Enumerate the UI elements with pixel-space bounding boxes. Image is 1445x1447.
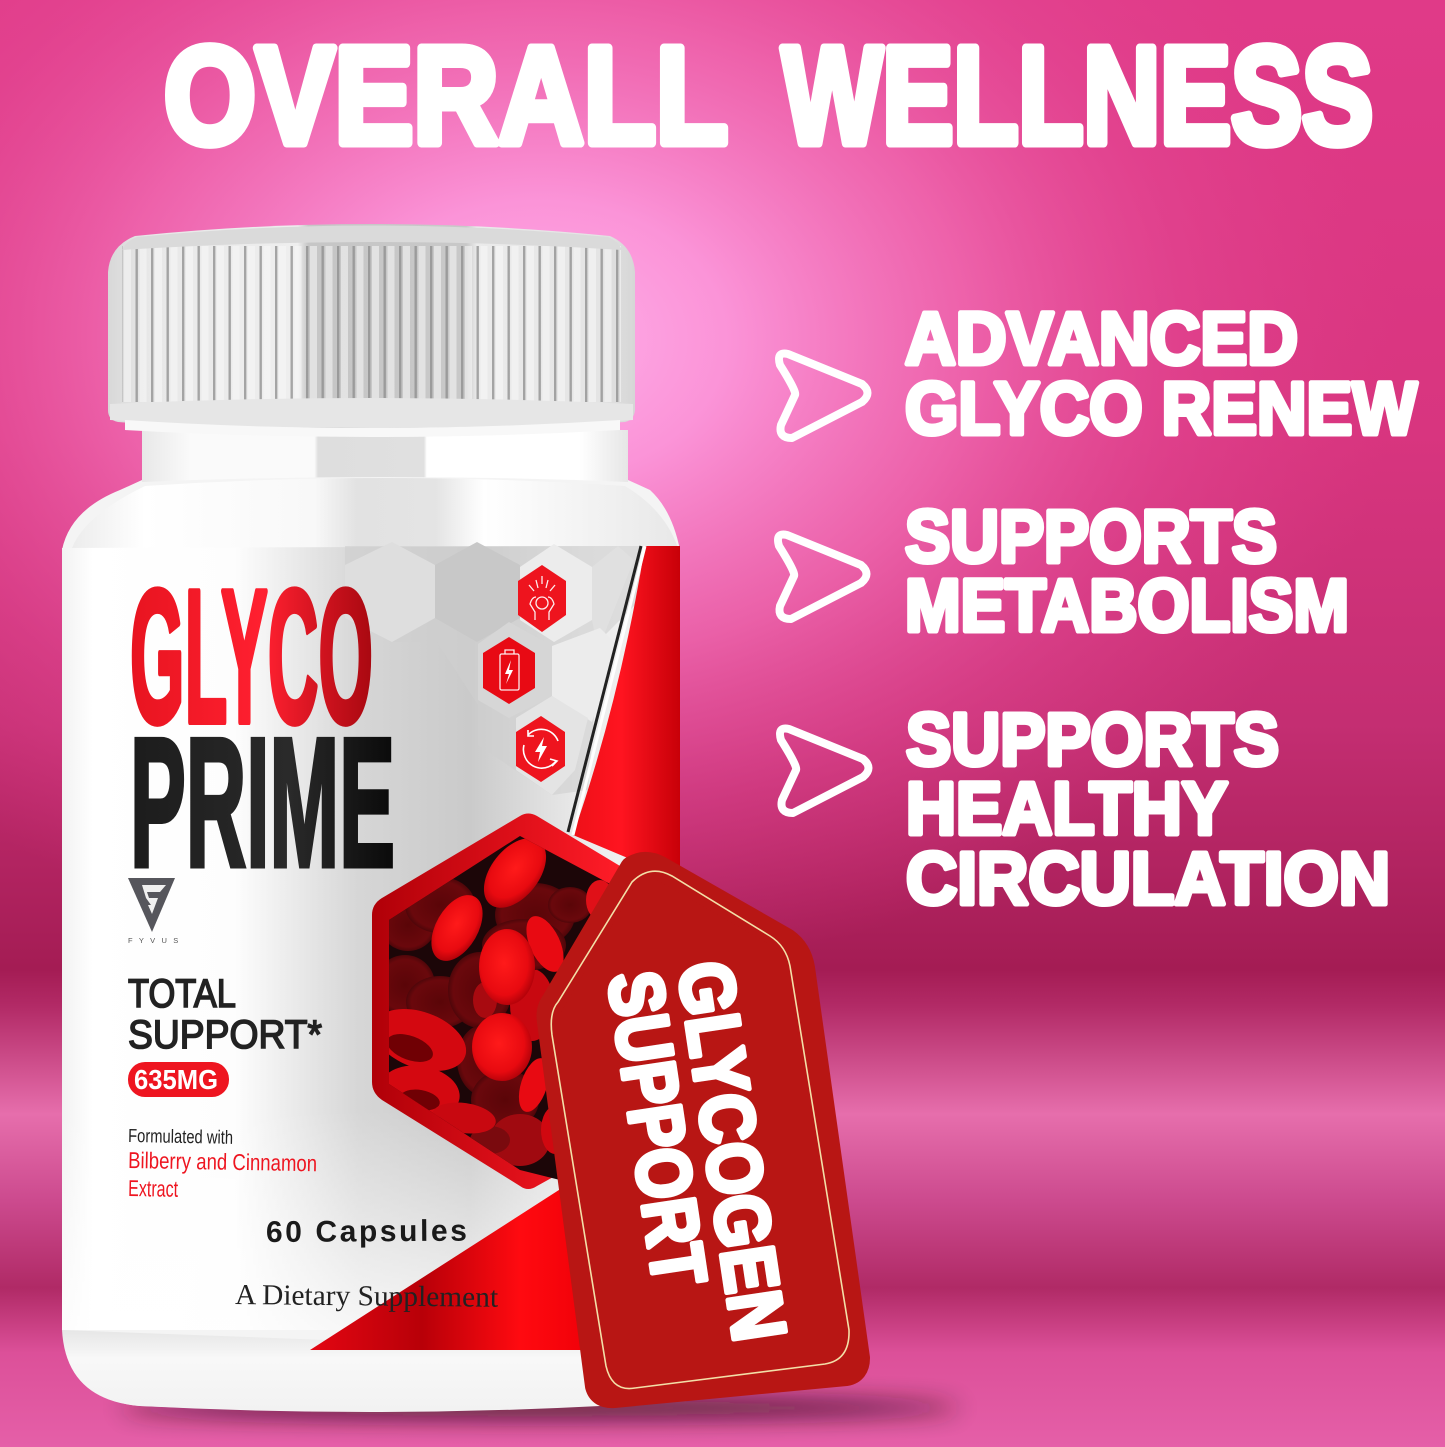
- supplement bottle: PRIME: [130, 699, 395, 905]
- floor shadow: [120, 1398, 960, 1418]
- tag shape: [548, 864, 858, 1396]
- icon: stress hands: [518, 565, 566, 632]
- formula text: Bilberry and Cinnamon: [128, 1147, 317, 1176]
- label text: total support: [128, 972, 322, 1057]
- benefit 1: [779, 297, 1417, 450]
- tag text: SUPPORT: [591, 966, 722, 1291]
- bottle cap: [108, 224, 635, 437]
- benefit 1 text: [905, 297, 1417, 450]
- honeycomb panel: [345, 542, 640, 795]
- benefit 3 text: [906, 698, 1390, 920]
- dietary supplement text: A Dietary Supplement: [235, 1279, 498, 1314]
- formula text: Extract: [128, 1175, 179, 1202]
- supplement bottle: GLYCO: [130, 551, 373, 763]
- arrow icon 3: [780, 728, 868, 813]
- logo: FYVUS: FYVUS: [128, 936, 185, 945]
- benefit 3 text: SUPPORTS: [906, 698, 1279, 781]
- arrow icon 1: [779, 353, 868, 438]
- label text: total support: TOTAL: [128, 972, 236, 1016]
- bottle body: [62, 430, 680, 1412]
- red corner panel with stripe: [568, 546, 680, 880]
- tag stitched border: [551, 871, 849, 1389]
- icon: energy cycle: [516, 716, 565, 782]
- benefit 3 text: CIRCULATION: [906, 837, 1390, 920]
- 60 capsules text: 60 Capsules: [266, 1215, 467, 1249]
- formula text: [128, 1126, 317, 1202]
- blood cells hexagon: [372, 814, 620, 1189]
- benefit 2: [778, 495, 1349, 647]
- formula text: Formulated with: [128, 1126, 233, 1149]
- bottom red panel: [310, 1170, 590, 1350]
- benefit 3 text: HEALTHY: [906, 767, 1228, 850]
- benefit 2 text: METABOLISM: [905, 564, 1349, 647]
- benefit 1 text: GLYCO RENEW: [905, 367, 1417, 450]
- benefit 1 text: ADVANCED: [905, 297, 1298, 380]
- title: OVERALL: [164, 19, 728, 173]
- tag text: GLYCOGEN: [661, 956, 802, 1346]
- benefit 3: [780, 698, 1390, 920]
- logo: FYVUS: [128, 878, 185, 945]
- supplement bottle: [62, 224, 680, 1412]
- arrow icon 2: [778, 534, 866, 619]
- benefit 2 text: [905, 495, 1349, 647]
- icon: battery: [483, 637, 535, 704]
- title: [164, 19, 1373, 173]
- benefit 2 text: SUPPORTS: [905, 495, 1277, 578]
- dosage badge: 635MG: [134, 1064, 218, 1095]
- hang tag: [548, 864, 858, 1396]
- label text: total support: SUPPORT*: [128, 1013, 322, 1057]
- tag text: [591, 956, 802, 1346]
